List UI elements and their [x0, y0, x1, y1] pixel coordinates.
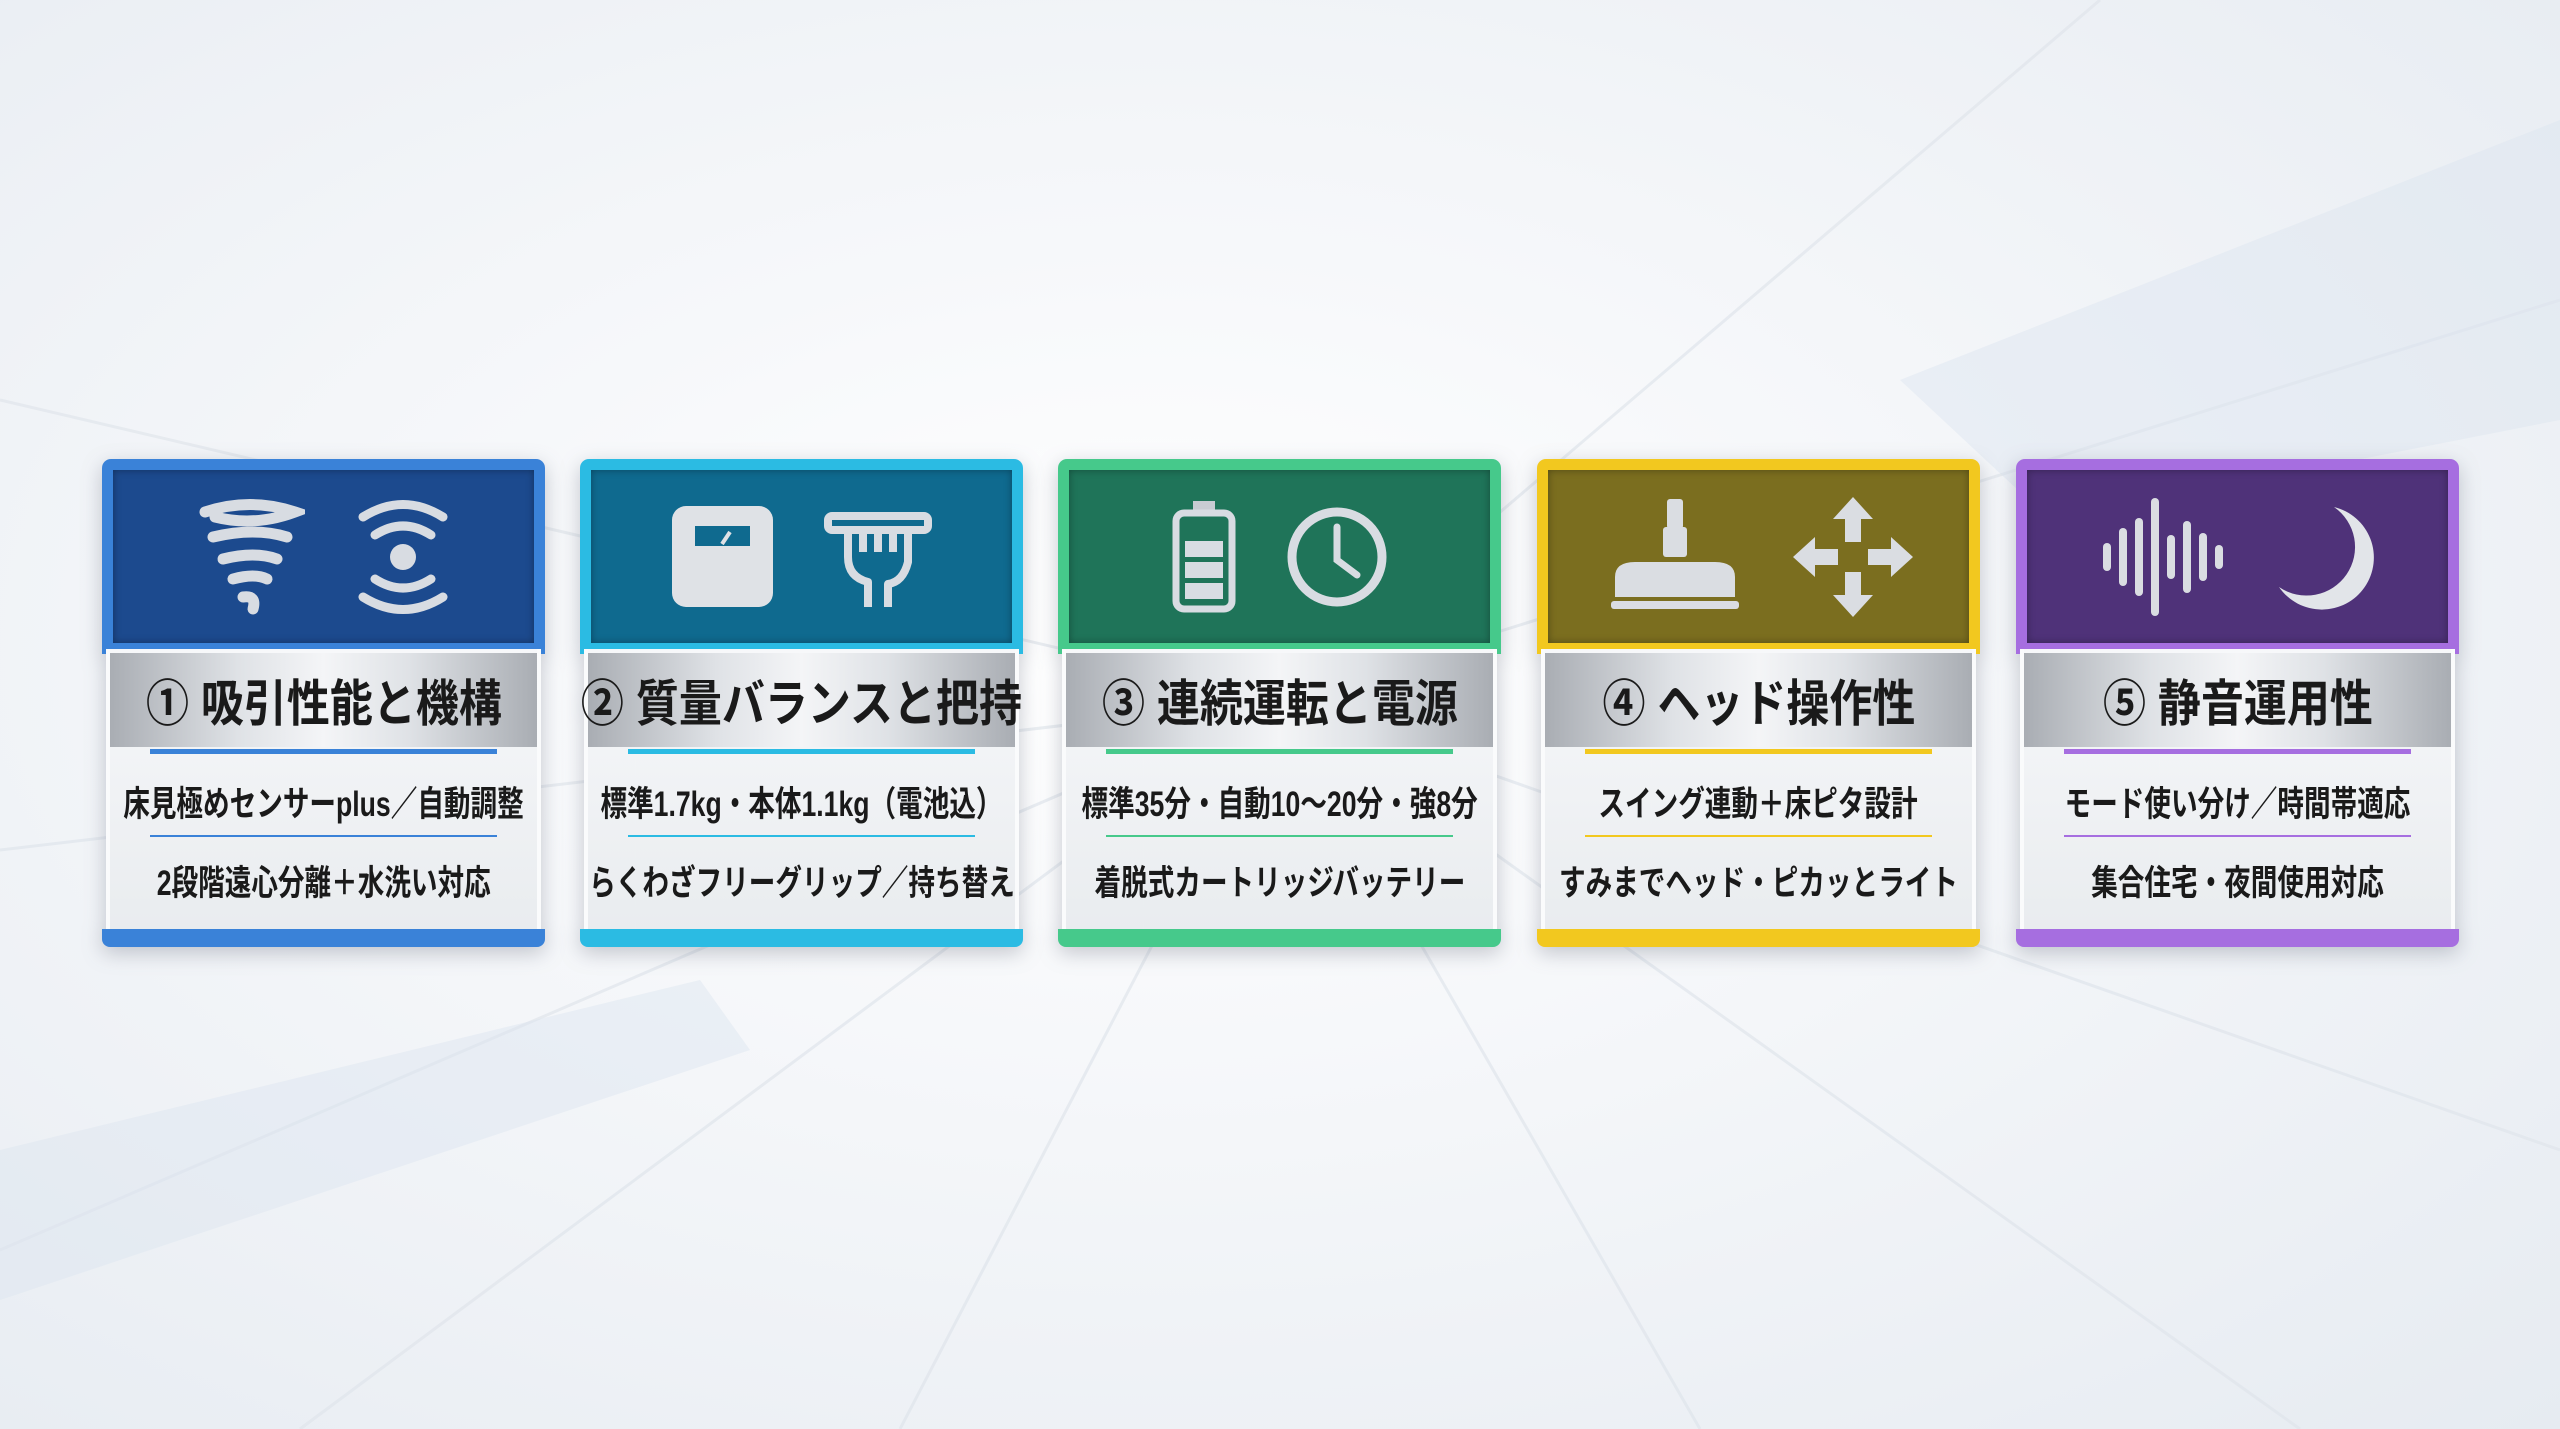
text row 2: 集合住宅・夜間使用対応	[2091, 864, 2384, 903]
header icons: tornado & sensor	[102, 459, 545, 654]
icon: battery	[1172, 501, 1236, 612]
title: ① 吸引性能と機構	[146, 676, 501, 732]
text row 1: モード使い分け／時間帯適応	[2065, 785, 2410, 824]
title	[110, 653, 537, 747]
header icons: vacuum head & arrows	[1537, 459, 1980, 654]
icon: scale	[672, 506, 773, 607]
text row 1: スイング連動＋床ピタ設計	[1599, 785, 1918, 824]
icon: clock	[1288, 508, 1386, 606]
title	[588, 653, 1015, 747]
title	[2024, 653, 2451, 747]
icon: vacuum head	[1611, 499, 1739, 609]
icon: sensor waves	[358, 500, 448, 614]
icon: sound wave	[2103, 498, 2223, 616]
title: ④ ヘッド操作性	[1602, 676, 1915, 732]
icon: tornado	[200, 499, 305, 614]
card 5	[2006, 456, 2468, 962]
header icons: scale & grip	[580, 459, 1023, 654]
card 2	[570, 456, 1032, 962]
header icons: battery & clock	[1058, 459, 1501, 654]
title: ② 質量バランスと把持	[581, 676, 1022, 732]
title	[1545, 653, 1972, 747]
card 1	[92, 456, 554, 962]
text row 2: 2段階遠心分離＋水洗い対応	[157, 864, 490, 903]
text row 1: 標準35分・自動10〜20分・強8分	[1081, 785, 1478, 824]
text row 2: らくわざフリーグリップ／持ち替え	[589, 864, 1014, 903]
card 3	[1048, 456, 1510, 962]
icon: fist grip	[824, 512, 932, 607]
card 4	[1528, 456, 1990, 962]
title	[1066, 653, 1493, 747]
text row 2: すみまでヘッド・ピカッとライト	[1559, 864, 1958, 903]
icon: crescent moon	[2279, 507, 2374, 610]
text row 1: 床見極めセンサーplus／自動調整	[123, 785, 524, 824]
title: ⑤ 静音運用性	[2103, 676, 2372, 732]
text row 2: 着脱式カートリッジバッテリー	[1094, 864, 1465, 903]
body	[106, 649, 541, 931]
text row 1: 標準1.7kg・本体1.1kg（電池込）	[600, 785, 1003, 824]
title: ③ 連続運転と電源	[1102, 676, 1457, 732]
header icons: sound wave & moon	[2016, 459, 2459, 654]
icon: 4-way arrows	[1793, 497, 1913, 617]
